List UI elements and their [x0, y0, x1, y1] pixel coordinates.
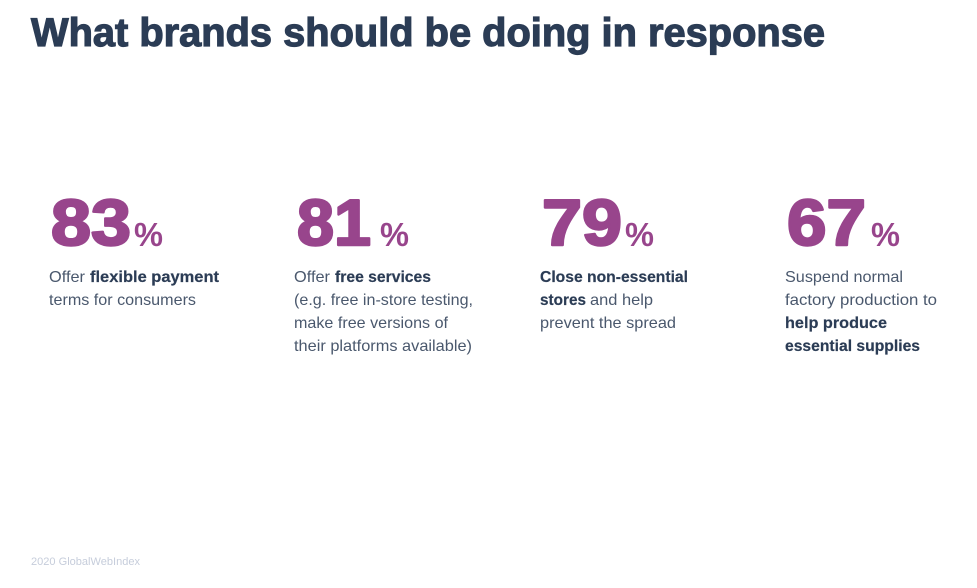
stat: 81%: 81 — [297, 186, 371, 259]
description: free services — [294, 269, 473, 355]
description: flexible payment: terms for consumers — [49, 292, 196, 309]
description: suspend factory production: help produce — [785, 315, 887, 332]
stat: 81%: % — [380, 216, 409, 253]
panel: close non-essential stores — [540, 186, 688, 332]
title: What brands should be doing in response — [31, 11, 825, 55]
panel: flexible payment terms — [49, 186, 220, 309]
stat: 67%: 67 — [787, 186, 866, 259]
stat: 79%: % — [625, 216, 654, 253]
description: flexible payment: flexible payment — [90, 269, 220, 286]
description: free services: their platforms available) — [294, 338, 472, 355]
stat: 83%: 83 — [51, 186, 131, 259]
stat: 81% — [297, 186, 409, 259]
stat: 83%: % — [134, 216, 163, 253]
description: close non-essential stores: stores — [540, 292, 586, 309]
stat: 79%: 79 — [542, 186, 622, 259]
description: suspend factory production — [785, 269, 937, 355]
panel: suspend factory production — [785, 186, 937, 355]
description: free services: make free versions of — [294, 315, 449, 332]
stat: 67%: % — [871, 216, 900, 253]
description: suspend factory production: factory production to — [785, 292, 937, 309]
description: close non-essential stores — [540, 269, 688, 332]
description: flexible payment: Offer — [49, 269, 86, 286]
stat: 67% — [787, 186, 900, 259]
description: free services: Offer — [294, 269, 331, 286]
description: close non-essential stores: prevent the spread — [540, 315, 676, 332]
footer source: 2020 GlobalWebIndex — [31, 556, 140, 568]
description: flexible payment — [49, 269, 220, 309]
stat: 83% — [51, 186, 163, 259]
panel: free services — [294, 186, 473, 355]
description: free services: free services — [335, 269, 431, 286]
description: suspend factory production: Suspend normal — [785, 269, 903, 286]
description: suspend factory production: essential supplies — [785, 338, 920, 355]
description: close non-essential stores: and help — [590, 292, 653, 309]
description: free services: (e.g. free in-store testing, — [294, 292, 473, 309]
stat: 79% — [542, 186, 654, 259]
description: close non-essential stores: Close non-essential — [540, 269, 688, 286]
